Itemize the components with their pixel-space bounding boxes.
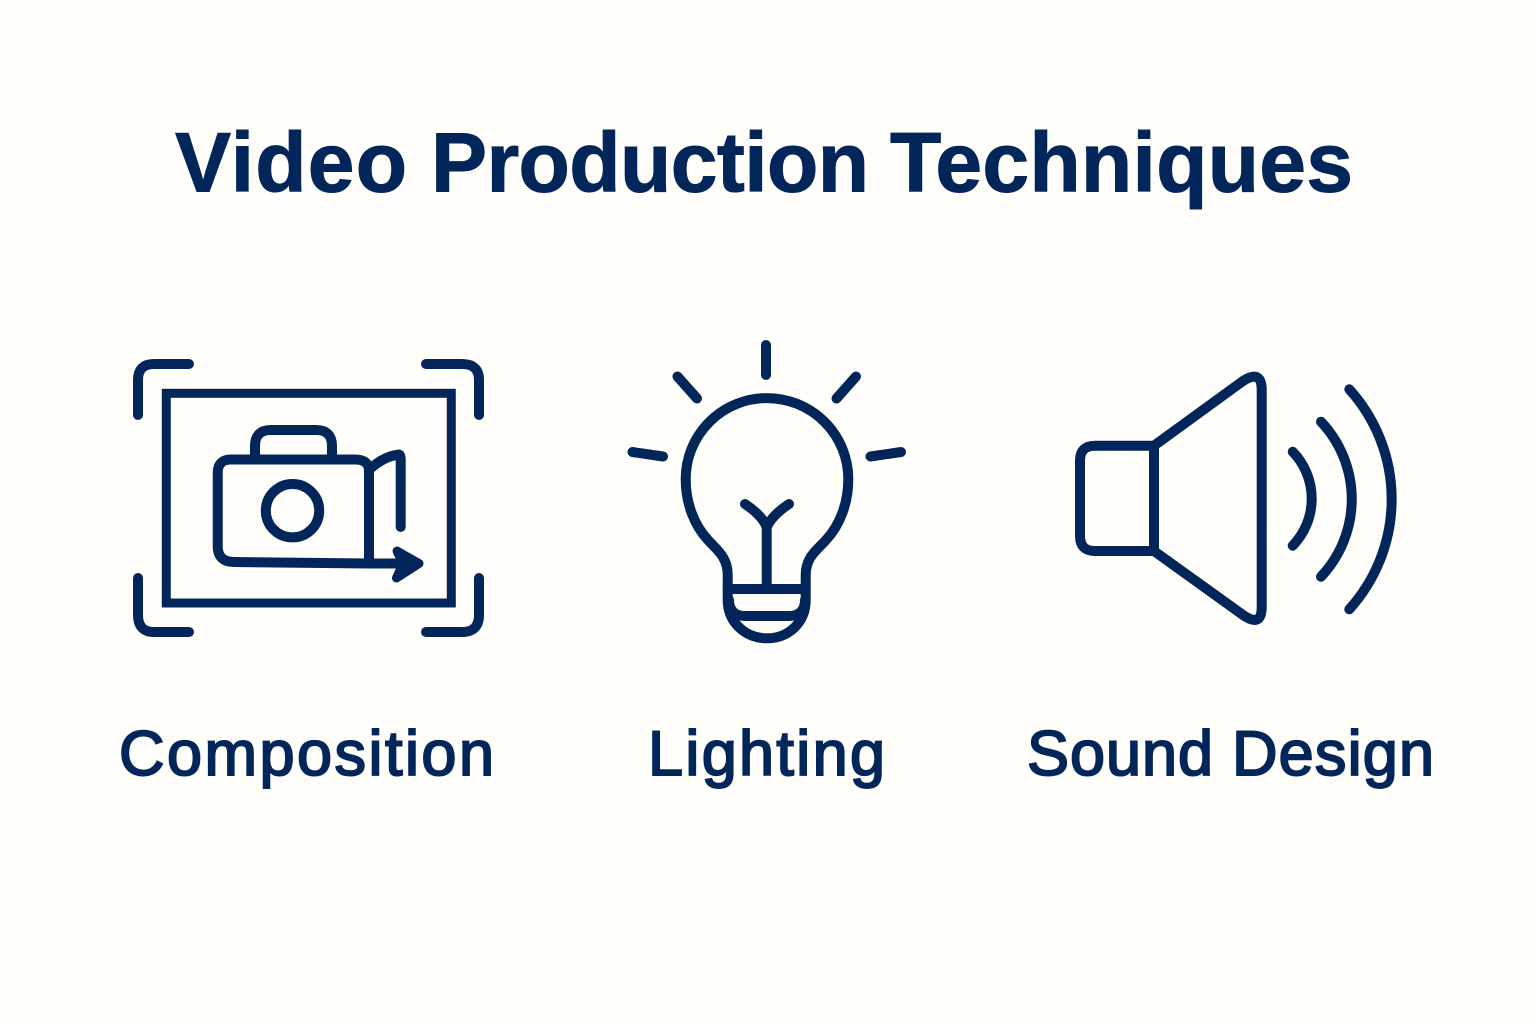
camera body — [218, 460, 417, 564]
light rays — [632, 345, 901, 456]
filament — [745, 504, 789, 589]
speaker box — [1080, 446, 1154, 551]
title: Techniques — [890, 116, 1353, 210]
label: Composition: Composition — [119, 719, 494, 789]
label: Sound Design: Sound — [1027, 719, 1213, 789]
title — [175, 116, 1353, 210]
label: Sound Design — [1027, 719, 1434, 789]
camera side viewfinder — [371, 454, 401, 527]
camera lens — [266, 484, 319, 537]
frame rectangle — [166, 393, 451, 603]
sound waves — [1293, 389, 1392, 609]
icon: light bulb — [632, 345, 901, 638]
camera handle — [255, 430, 332, 459]
viewfinder corner brackets — [138, 364, 479, 632]
pan arrow head — [396, 551, 419, 578]
bulb glass and base — [686, 398, 848, 638]
label: Sound Design: Design — [1232, 719, 1434, 789]
title: Video — [175, 116, 407, 210]
title: Production — [431, 116, 869, 210]
icon: composition frame with camera — [138, 364, 479, 632]
icon: speaker — [1080, 377, 1392, 620]
base bands — [728, 589, 806, 616]
speaker cone — [1154, 377, 1262, 620]
label: Lighting: Lighting — [648, 719, 885, 789]
